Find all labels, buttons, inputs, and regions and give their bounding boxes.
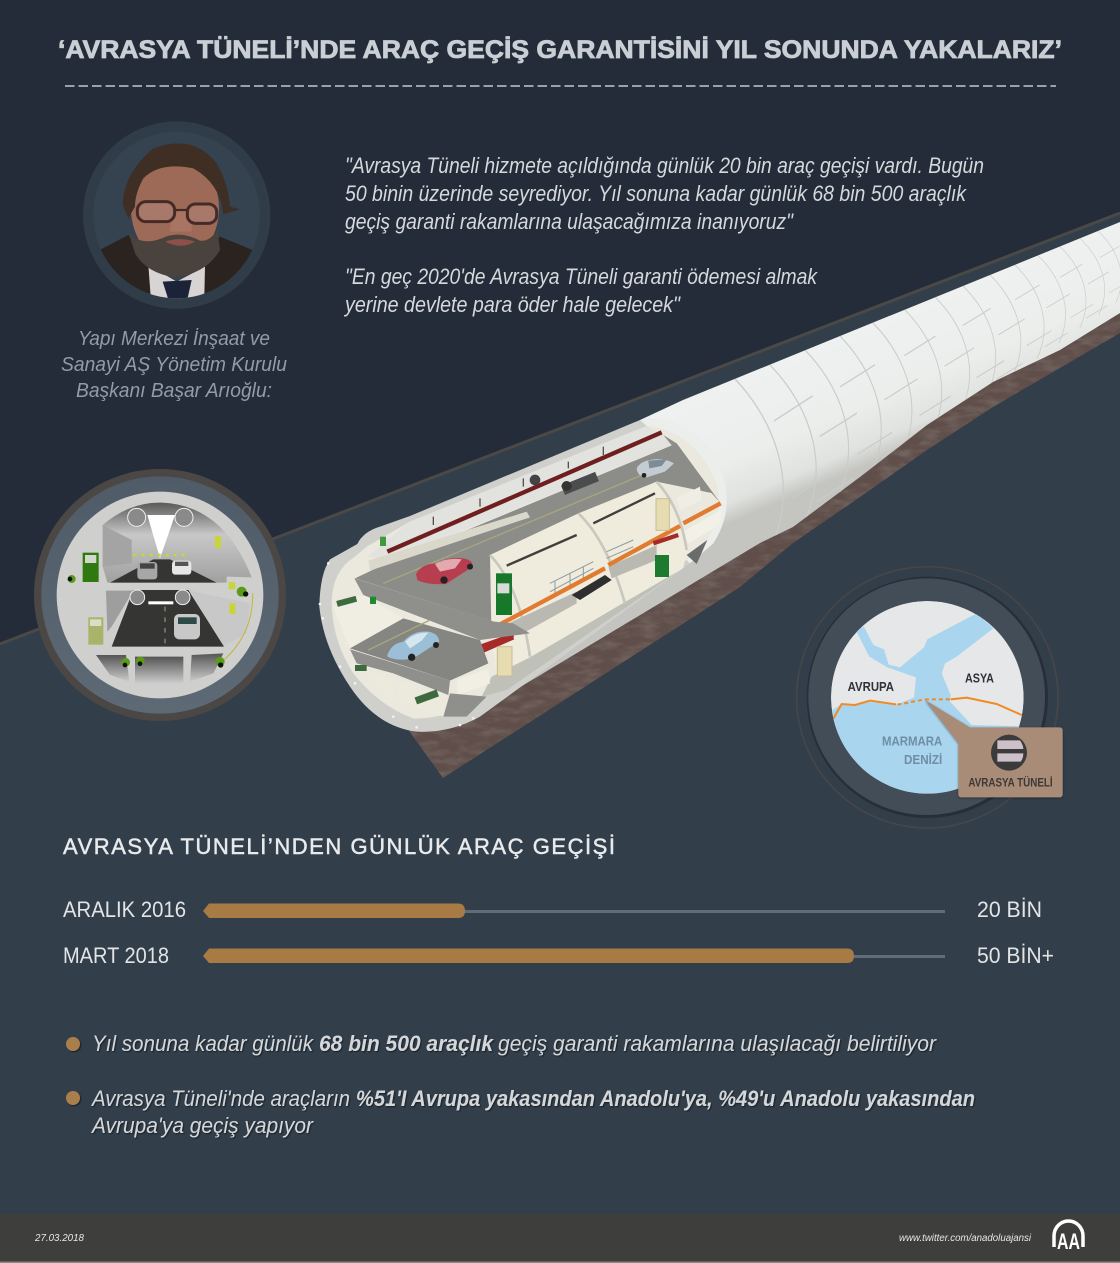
upper tube room (103, 503, 252, 583)
upper barrier (368, 512, 530, 571)
rim rivets (319, 562, 475, 729)
quote text: "En geç 2020'de Avrasya Tüneli garanti ödemesi almak (345, 264, 818, 289)
section heading: AVRASYA TÜNELİ’NDEN GÜNLÜK ARAÇ GEÇİŞİ (63, 834, 615, 859)
portrait caption: Yapı Merkezi İnşaat ve (78, 328, 270, 350)
tunnel cutaway illustration (319, 419, 727, 732)
central cream wall (490, 482, 687, 675)
water (832, 614, 1020, 794)
bar: Mart 2018: MART 2018 (63, 943, 169, 968)
bright stone edge of the opening (640, 419, 727, 563)
tunnel outer shell with segments (522, 222, 1120, 686)
title: ‘AVRASYA TÜNELİ’NDE ARAÇ GEÇİŞ GARANTİSİNİ YIL SONUNDA YAKALARIZ’ (58, 35, 1062, 64)
bottom compartments (96, 653, 223, 683)
quote text: yerine devlete para öder hale gelecek" (343, 292, 681, 317)
upper road (355, 443, 713, 623)
upper yellow lamp (215, 536, 221, 548)
walkway along lower edge (482, 563, 690, 697)
quote text: geçiş garanti rakamlarına ulaşacağımıza inanıyoruz" (345, 209, 794, 234)
logo: AA: AA (1057, 1229, 1080, 1254)
callout: Avrasya Tüneli (925, 700, 1063, 797)
lower wall left (333, 595, 403, 648)
callout: Avrasya Tüneli: AVRASYA TÜNELİ (968, 777, 1053, 790)
portrait of Başar Arıoğlu (83, 121, 270, 310)
bullet 1: 68 bin 500 araçlık (319, 1031, 495, 1056)
quote text (343, 153, 984, 317)
lower deck slab (350, 649, 450, 695)
upper ceiling strip (367, 426, 677, 560)
bullet 1: Yıl sonuna kadar günlük (92, 1031, 314, 1056)
map labels: MARMARA (882, 735, 942, 749)
road line (833, 698, 1022, 719)
bullet 1: geçiş garanti rakamlarına ulaşılacağı belirtiliyor (498, 1031, 938, 1056)
lower fans (130, 590, 190, 605)
upper fans (128, 508, 193, 526)
bullet 2: Avrupa'ya geçiş yapıyor (90, 1113, 315, 1138)
red cable tray upper (387, 432, 662, 552)
quote text: "Avrasya Tüneli hizmete açıldığında günlük 20 bin araç geçişi vardı. Bugün (345, 153, 984, 178)
dark duct (572, 575, 612, 600)
portrait caption: Sanayi AŞ Yönetim Kurulu (61, 354, 287, 376)
map labels: DENİZİ (904, 752, 942, 767)
far white barrier (677, 487, 702, 510)
lower pale door (88, 617, 103, 645)
far dark niche (687, 540, 707, 564)
map labels: AVRUPA (848, 680, 894, 694)
logo: AA (1054, 1221, 1083, 1254)
bullet 2: %51'I Avrupa yakasından Anadolu'ya, %49'u Anadolu yakasından (356, 1086, 975, 1111)
upper deck slab (354, 578, 530, 640)
location map circle (797, 567, 1063, 828)
cross-section circle (34, 469, 286, 721)
lower tube room (106, 590, 224, 647)
green fittings (336, 537, 439, 704)
soil under the tunnel (407, 305, 1120, 778)
far interior shade (663, 435, 721, 503)
wall ribs (490, 482, 687, 657)
bar: Aralık 2016: 20 BİN (977, 897, 1042, 922)
front concrete rim (319, 419, 727, 732)
green cabinet front (496, 573, 512, 615)
portrait caption (61, 328, 287, 402)
bar chart (63, 897, 1054, 968)
lower red trays (476, 535, 678, 653)
green pipes and lamps (68, 575, 253, 668)
bullet 1 (66, 1031, 938, 1056)
upper cars (137, 561, 191, 579)
land (831, 601, 1024, 794)
map labels: ASYA (965, 671, 994, 685)
ventilation fan (530, 472, 599, 495)
railing (550, 540, 633, 593)
bullet 2: Avrasya Tüneli'nde araçların (90, 1086, 350, 1111)
orange pipe (483, 503, 721, 633)
bar: Aralık 2016: ARALIK 2016 (63, 897, 186, 922)
green cabinet rear (655, 555, 669, 577)
date: 27.03.2018 (34, 1233, 84, 1244)
portrait caption: Başkanı Başar Arıoğlu: (76, 380, 272, 402)
footer bar (0, 1214, 1120, 1263)
diagonal line (0, 213, 1120, 644)
quote text: 50 binin üzerinde seyrediyor. Yıl sonuna kadar günlük 68 bin 500 araçlık (345, 181, 967, 206)
map labels (848, 671, 994, 767)
twitter address: www.twitter.com/anadoluajansi (899, 1233, 1032, 1244)
bar: Mart 2018: 50 BİN+ (977, 943, 1054, 968)
upper green door (83, 553, 99, 582)
blue car (387, 631, 439, 661)
interior back wall (332, 426, 719, 718)
bar: Aralık 2016 (63, 897, 1042, 922)
barrier wall lower (457, 668, 490, 695)
upper road markings (383, 472, 650, 583)
red car (416, 558, 473, 584)
lower car (174, 614, 200, 639)
bullet 2 (66, 1086, 975, 1138)
underfloor compartments (358, 667, 447, 717)
bar: Mart 2018 (63, 943, 1054, 968)
lower rim shading (443, 693, 487, 717)
lower road (350, 618, 488, 681)
far side wall behind pipe (683, 510, 721, 543)
dark wall slots (507, 493, 655, 566)
doors (497, 499, 669, 676)
silver car upper (637, 459, 674, 478)
walkway slabs (508, 545, 657, 635)
